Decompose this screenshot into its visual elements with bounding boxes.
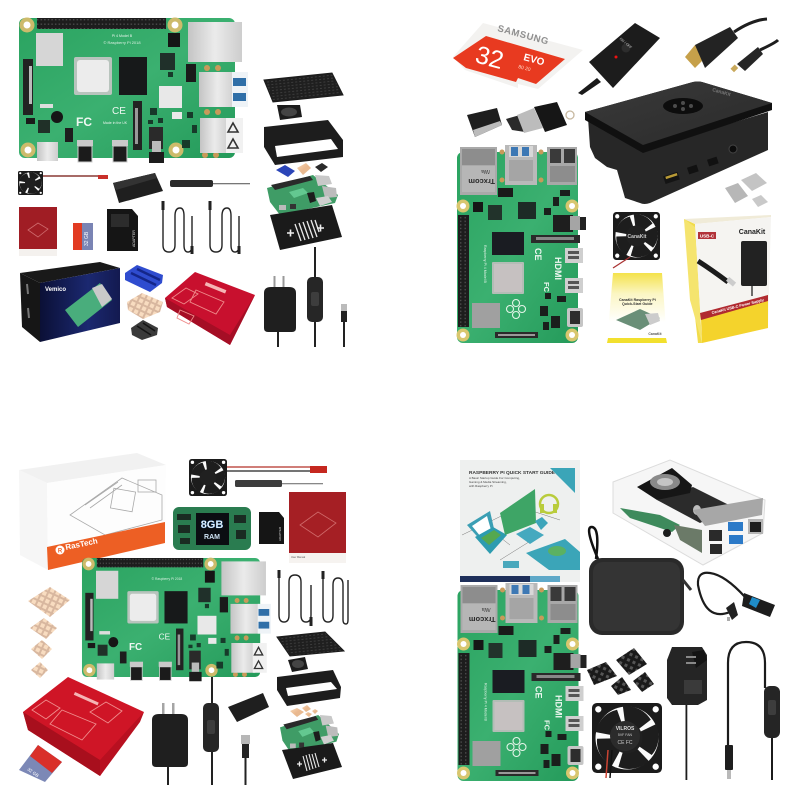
black carry case — [589, 527, 691, 635]
screwdriver — [235, 480, 323, 487]
vertical Raspberry Pi 4: FC — [542, 282, 551, 293]
vertical Raspberry Pi 4: Trxcom — [468, 615, 496, 624]
copper heatsink — [127, 293, 163, 319]
case bottom — [270, 205, 342, 250]
horizontal Raspberry Pi 4 — [82, 558, 271, 681]
kit 3: RasTech Raspberry Pi kit — [19, 453, 348, 785]
Samsung SD card: 32 — [472, 41, 507, 75]
case lid with mesh — [264, 73, 343, 102]
USB-C plug — [241, 735, 250, 785]
red retail box — [165, 272, 255, 345]
vertical Raspberry Pi 4 — [456, 145, 586, 343]
microSD card — [19, 745, 62, 782]
red retail box — [23, 677, 144, 776]
board: horizontal Raspberry Pi 4: Made in the UK — [103, 121, 128, 125]
USB-C power supply box — [684, 215, 771, 343]
quick start guide book: A Basic Startup Guide For Computing, — [469, 476, 520, 480]
miniature board — [280, 715, 339, 753]
quick-start guide booklet: CanaKit — [648, 332, 662, 336]
vertical Raspberry Pi 4: FC — [542, 720, 552, 731]
case frame — [277, 670, 341, 706]
power cable with inline switch — [725, 642, 780, 780]
USB-C power supply box: CanaKit — [739, 229, 766, 236]
HDMI cable — [685, 19, 767, 68]
red booklet: User Manual — [291, 556, 306, 559]
quick start guide book: RASPBERRY PI QUICK START GUIDE — [469, 470, 556, 476]
vertical Raspberry Pi 4: Trxcom — [468, 177, 495, 186]
on/off switch — [578, 23, 660, 95]
card reader — [228, 693, 269, 722]
quick start guide book: with Raspberry Pi — [469, 484, 493, 488]
red quick start booklet — [19, 207, 57, 256]
black heatsinks — [587, 648, 654, 695]
vertical Raspberry Pi 4: HDMI — [553, 257, 563, 280]
kit 4: Vilros Raspberry Pi kit — [457, 460, 780, 781]
vertical Raspberry Pi 4: /Wa — [482, 606, 490, 612]
fan with wire — [187, 459, 327, 499]
on/off switch: ON / OFF — [619, 37, 633, 50]
SD adapter — [107, 209, 138, 251]
miniature board — [267, 175, 338, 215]
CanaKit fan: CanaKit — [628, 234, 647, 240]
Samsung SD card — [453, 23, 583, 89]
vertical Raspberry Pi 4 — [457, 583, 586, 781]
8GB RAM module: 8GB — [201, 519, 223, 531]
case bottom — [282, 743, 342, 779]
SD adapter — [259, 512, 284, 544]
mini cooling fan — [277, 105, 302, 120]
vertical Raspberry Pi 4: HDMI — [554, 695, 564, 718]
micro HDMI cable — [730, 40, 778, 72]
8GB RAM module: RAM — [204, 534, 220, 541]
vertical Raspberry Pi 4: CE — [534, 686, 544, 699]
microSD card — [73, 223, 93, 250]
vertical Raspberry Pi 4: /Wa — [481, 168, 490, 174]
microSD card: 32 GB — [26, 767, 40, 778]
quick-start guide booklet: Quick-Start Guide — [622, 302, 653, 306]
power adapter — [152, 703, 188, 785]
silver heatsinks — [725, 173, 768, 207]
USB-C plug and cable — [341, 304, 347, 347]
copper heatsinks — [28, 587, 70, 678]
screwdriver — [170, 180, 250, 187]
vertical Raspberry Pi 4: Raspberry Pi 4 Model B — [484, 683, 488, 722]
USB card reader with microSD — [506, 102, 574, 133]
black CanaKit case: CanaKit — [711, 87, 732, 98]
vertical Raspberry Pi 4: Raspberry Pi 4 Model B — [483, 245, 487, 284]
USB cables — [162, 201, 240, 254]
kit 2: CanaKit Raspberry Pi kit — [453, 19, 778, 343]
fan with wire — [17, 171, 108, 197]
board: horizontal Raspberry Pi 4: CE — [112, 106, 126, 117]
white RasTech box: R — [58, 548, 63, 554]
board: horizontal Raspberry Pi 4 — [19, 18, 248, 163]
micro USB adapter cable — [698, 573, 775, 621]
SD adapter: ADAPTER — [278, 526, 282, 541]
horizontal Raspberry Pi 4: CE — [159, 631, 171, 642]
USB card reader cap — [467, 108, 502, 137]
black heatsink — [131, 320, 158, 340]
white RasTech box: RasTech — [65, 536, 99, 552]
Vilros fan: VILROS — [616, 726, 635, 732]
quick-start guide booklet — [607, 273, 667, 343]
board: horizontal Raspberry Pi 4: FC — [76, 115, 92, 129]
dark Vemico retail box: Vemico — [45, 287, 66, 293]
quick start guide book — [460, 460, 580, 582]
white RasTech box — [19, 453, 166, 570]
inline switch cable — [307, 247, 323, 347]
blue heatsink — [125, 265, 163, 292]
case lid — [277, 632, 344, 656]
horizontal Raspberry Pi 4: FC — [129, 642, 142, 653]
vertical Raspberry Pi 4: CE — [533, 248, 543, 261]
clear acrylic case — [613, 460, 765, 565]
power adapter — [264, 276, 296, 347]
case middle frame — [264, 120, 343, 165]
USB cables — [278, 570, 348, 626]
dark Vemico retail box — [20, 262, 120, 342]
black CanaKit case — [585, 82, 772, 204]
Samsung SD card: SAMSUNG — [496, 23, 550, 48]
mini fan — [288, 657, 308, 672]
USB-C power supply box: USB-C — [700, 234, 715, 238]
microSD card: 32 GB — [84, 231, 90, 246]
USB-C power supply box: CanaKit USB-C Power Supply — [711, 298, 765, 315]
quick start guide book: Gaming & Media Streaming, — [469, 480, 507, 484]
Vilros fan: CE FC — [618, 740, 633, 746]
Vilros fan — [589, 703, 665, 778]
board: horizontal Raspberry Pi 4: Pi 4 Model B — [112, 34, 133, 38]
CanaKit fan — [611, 212, 662, 268]
Vilros fan: 5VF FAN — [618, 733, 633, 737]
small copper heatsinks — [290, 705, 318, 717]
small heatsinks — [276, 163, 328, 177]
8GB RAM module — [173, 507, 251, 550]
card reader — [113, 173, 163, 203]
horizontal Raspberry Pi 4: © Raspberry Pi 2018 — [152, 577, 182, 581]
wall power adapter — [667, 647, 707, 780]
red booklet — [289, 492, 346, 563]
Samsung SD card: EVO — [522, 52, 546, 68]
quick-start guide booklet: CanaKit Raspberry Pi — [619, 298, 656, 302]
board: horizontal Raspberry Pi 4: © Raspberry Pi 2018 — [103, 40, 141, 45]
SD adapter: ADAPTER — [132, 230, 136, 247]
inline switch cable — [203, 677, 219, 785]
kit 1: Vemico Raspberry Pi kit — [17, 18, 347, 347]
Samsung SD card: 80 20 — [517, 64, 531, 73]
